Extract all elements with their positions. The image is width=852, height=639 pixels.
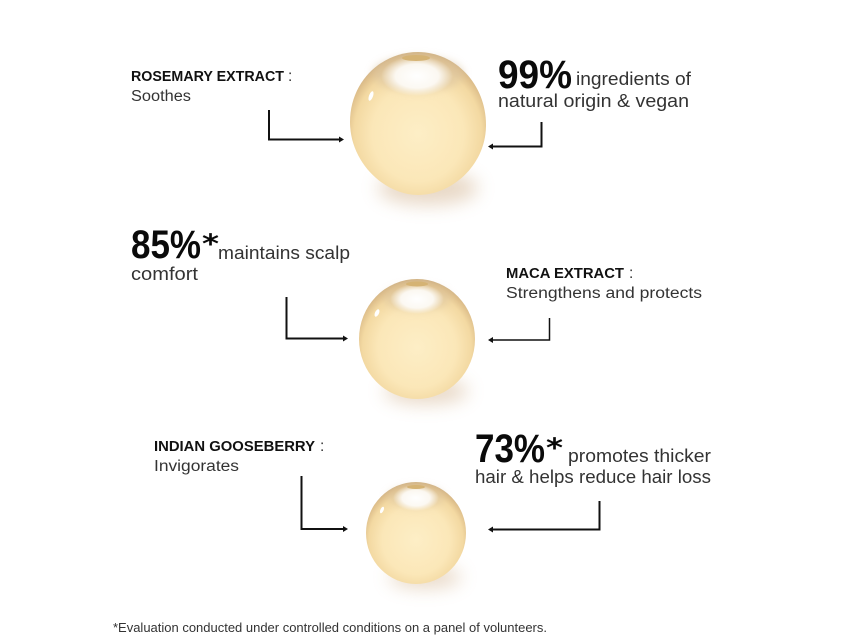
stat: 73% thicker hair: * [546,433,563,464]
arrow: 85% [286,297,348,342]
stat: 99% natural origin [498,53,692,111]
arrow: rosemary [269,110,344,142]
stat: 73% thicker hair: 73% [475,427,545,471]
stat: 85% scalp comfort [131,223,350,284]
stat: 73% thicker hair [475,427,711,487]
text: rosemary extract: : [288,68,292,85]
droplet: rosemary [350,52,486,205]
text: indian gooseberry [154,438,324,475]
stat: 85% scalp comfort: * [202,229,219,260]
arrow: indian gooseberry [302,476,348,532]
stat: 99% natural origin: 99% [498,53,572,97]
text: indian gooseberry: Invigorates [154,458,239,475]
text: maca extract [506,265,702,302]
text: rosemary extract: Soothes [131,88,191,105]
stat: 73% thicker hair: hair & helps reduce hair loss [475,467,711,487]
text: maca extract: : [629,265,633,282]
arrow: 73% [488,501,600,532]
stat: 85% scalp comfort: comfort [131,264,198,284]
text: rosemary extract [131,68,292,105]
stat: 85% scalp comfort: 85% [131,223,201,267]
arrow: maca [488,318,550,343]
text: maca extract: MACA EXTRACT [506,266,624,282]
arrow: 99% [488,122,542,150]
text: indian gooseberry: INDIAN GOOSEBERRY [154,439,315,455]
text: maca extract: Strengthens and protects [506,285,702,302]
footnote: *Evaluation conducted under controlled conditions on a panel of volunteers. [113,621,547,635]
stat: 99% natural origin: ingredients of [576,69,692,89]
droplet: maca [359,279,475,404]
droplet: indian gooseberry [366,482,466,588]
stat: 73% thicker hair: promotes thicker [568,446,711,466]
stat: 85% scalp comfort: maintains scalp [218,243,350,263]
stat: 99% natural origin: natural origin & vegan [498,91,689,111]
text: rosemary extract: ROSEMARY EXTRACT [131,69,284,85]
text: indian gooseberry: : [320,438,324,455]
